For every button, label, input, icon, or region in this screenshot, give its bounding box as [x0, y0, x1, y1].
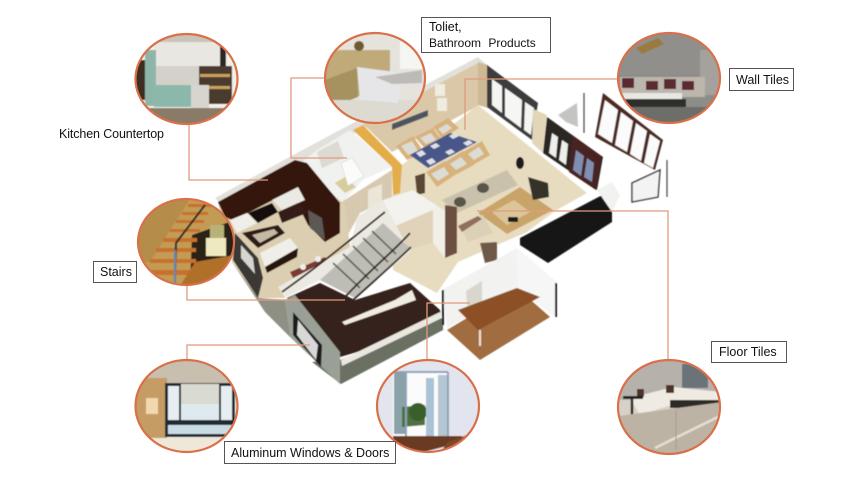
photo circle: stairs — [138, 199, 235, 286]
photo circle: doors — [377, 360, 480, 453]
photo circle: windows — [135, 360, 238, 453]
label: Stairs — [94, 262, 136, 282]
label: Wall Tiles: Wall Tiles — [736, 73, 789, 87]
photo circle: kitchen — [135, 33, 238, 125]
leader lines — [187, 78, 668, 360]
isometric house floor plan — [215, 57, 667, 384]
label: Stairs: Stairs — [100, 265, 132, 279]
rear room by stairs — [383, 190, 445, 258]
photo circle: toilet — [324, 33, 426, 125]
label: Kitchen Countertop: Kitchen Countertop — [59, 127, 164, 141]
orange partition — [353, 125, 402, 195]
label: Toilet and Bathroom Products: Bathroom Products — [429, 36, 536, 50]
label: Floor Tiles: Floor Tiles — [719, 345, 777, 359]
kitchen — [218, 160, 350, 338]
structural column — [445, 205, 457, 258]
label: Toilet and Bathroom Products — [422, 18, 550, 52]
lower landing and exterior wall — [285, 283, 443, 384]
front living room black wall — [520, 190, 612, 263]
label: Floor Tiles — [712, 342, 786, 362]
photo circle: wall tiles — [618, 33, 721, 125]
label: Aluminum Windows and Doors: Aluminum Windows & Doors — [231, 446, 389, 460]
label: Aluminum Windows and Doors — [224, 442, 396, 464]
staircase — [278, 200, 411, 300]
photo circle: floor tiles — [618, 360, 722, 455]
dining room striped wall — [363, 63, 478, 152]
dining set — [396, 118, 490, 187]
balcony — [442, 248, 557, 360]
label: Toilet and Bathroom Products: Toliet, — [429, 20, 462, 34]
main floor — [392, 105, 587, 293]
wall pictures — [392, 84, 447, 130]
right window wall — [478, 62, 667, 202]
living room sofa and rug — [415, 157, 553, 263]
back wall, top edge — [215, 57, 488, 208]
label: Wall Tiles — [730, 68, 794, 90]
bathroom — [302, 130, 392, 240]
